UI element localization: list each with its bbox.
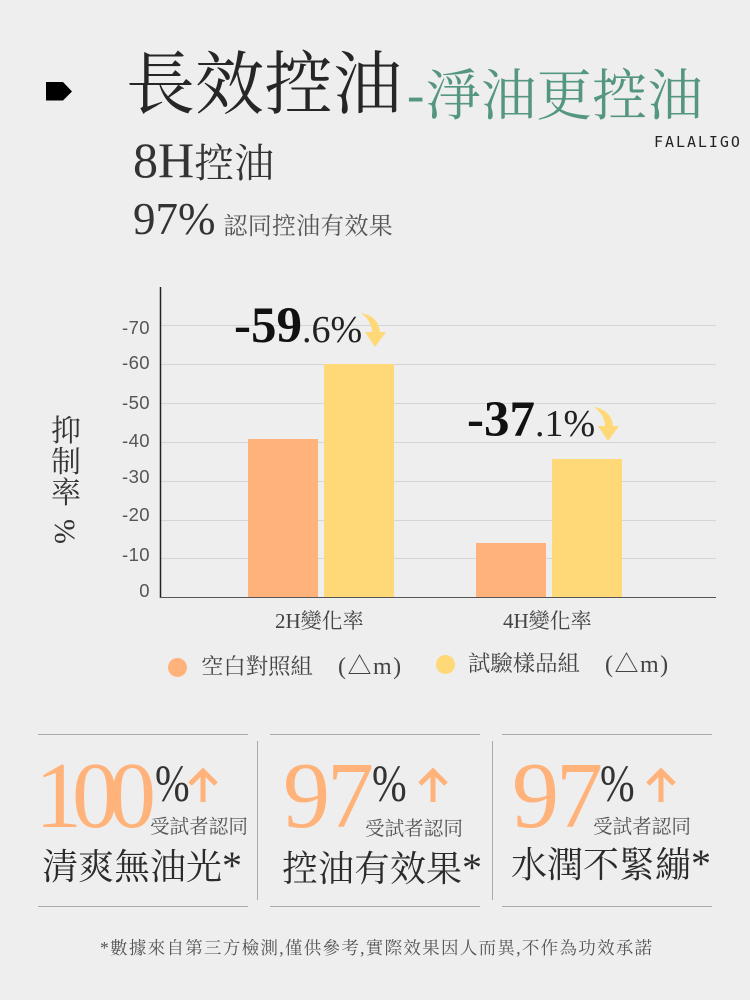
claim text: 清爽無油光*	[42, 843, 242, 888]
bar chart	[48, 287, 716, 633]
y axis tick labels: -40	[122, 430, 150, 451]
legend item: sample group	[436, 651, 670, 678]
icon: bullet pentagon	[46, 82, 72, 100]
panel: fresh no shine	[35, 734, 258, 907]
subtitle in green: -淨油更控油	[407, 67, 703, 128]
y axis tick labels: -50	[122, 392, 150, 413]
category label: 4H: 4H變化率	[503, 609, 592, 633]
title: 長效控油	[126, 47, 402, 123]
stat: 97 percent agree: 97% 認同控油有效果	[133, 194, 393, 244]
y axis title: %	[48, 519, 81, 544]
panel: oil control effect	[270, 734, 493, 907]
panel: hydrated not tight	[502, 734, 712, 907]
y axis tick labels: -30	[122, 466, 150, 487]
stat number: 97	[512, 744, 600, 848]
value label: -37.1%: -37.1%	[467, 392, 595, 448]
legend item: sample group: (△m)	[605, 652, 670, 678]
y axis tick labels: 0	[139, 580, 150, 601]
category label: 2H: 2H變化率	[275, 609, 364, 633]
footnote: *數據來自第三方檢測,僅供參考,實際效果因人而異,不作為功效承諾	[100, 938, 653, 958]
legend item: control group: 空白對照組	[201, 654, 313, 679]
panel: hydrated not tight: 受試者認同	[593, 817, 691, 838]
claim text: 水潤不緊繃*	[511, 841, 711, 886]
y axis tick labels: -10	[122, 544, 150, 565]
panel: fresh no shine: 受試者認同	[150, 817, 248, 838]
brand mark: FALALIGO	[654, 133, 742, 151]
icon: curved arrow down	[594, 407, 619, 441]
stat number: 97	[283, 744, 371, 848]
value label: -59.6%: -59.6%	[234, 298, 362, 354]
y axis tick labels	[122, 317, 150, 601]
legend	[168, 651, 670, 680]
icon: curved arrow down	[361, 313, 386, 347]
y axis title: 制	[51, 446, 81, 479]
legend item: control group	[168, 654, 403, 680]
y axis title: 抑	[51, 415, 81, 448]
y axis title: 率	[51, 477, 81, 510]
claim text: 控油有效果*	[282, 845, 482, 890]
panel: fresh no shine: %	[155, 756, 190, 813]
stat number: 100	[35, 744, 146, 848]
panel: oil control effect: 受試者認同	[365, 819, 463, 840]
y axis tick labels: -20	[122, 504, 150, 525]
legend item: sample group: 試驗樣品組	[468, 651, 580, 676]
y axis tick labels: -70	[122, 317, 150, 338]
panel: oil control effect: %	[372, 756, 407, 813]
y axis title	[48, 415, 81, 544]
chart grid, axes and bars	[160, 287, 716, 598]
panel: hydrated not tight: %	[600, 756, 635, 813]
legend item: control group: (△m)	[338, 654, 403, 680]
icon: up arrow	[188, 768, 218, 802]
y axis tick labels: -60	[122, 352, 150, 373]
heading: 8H oil control: 8H控油	[133, 132, 274, 188]
icon: up arrow	[646, 768, 676, 802]
icon: up arrow	[418, 768, 448, 802]
